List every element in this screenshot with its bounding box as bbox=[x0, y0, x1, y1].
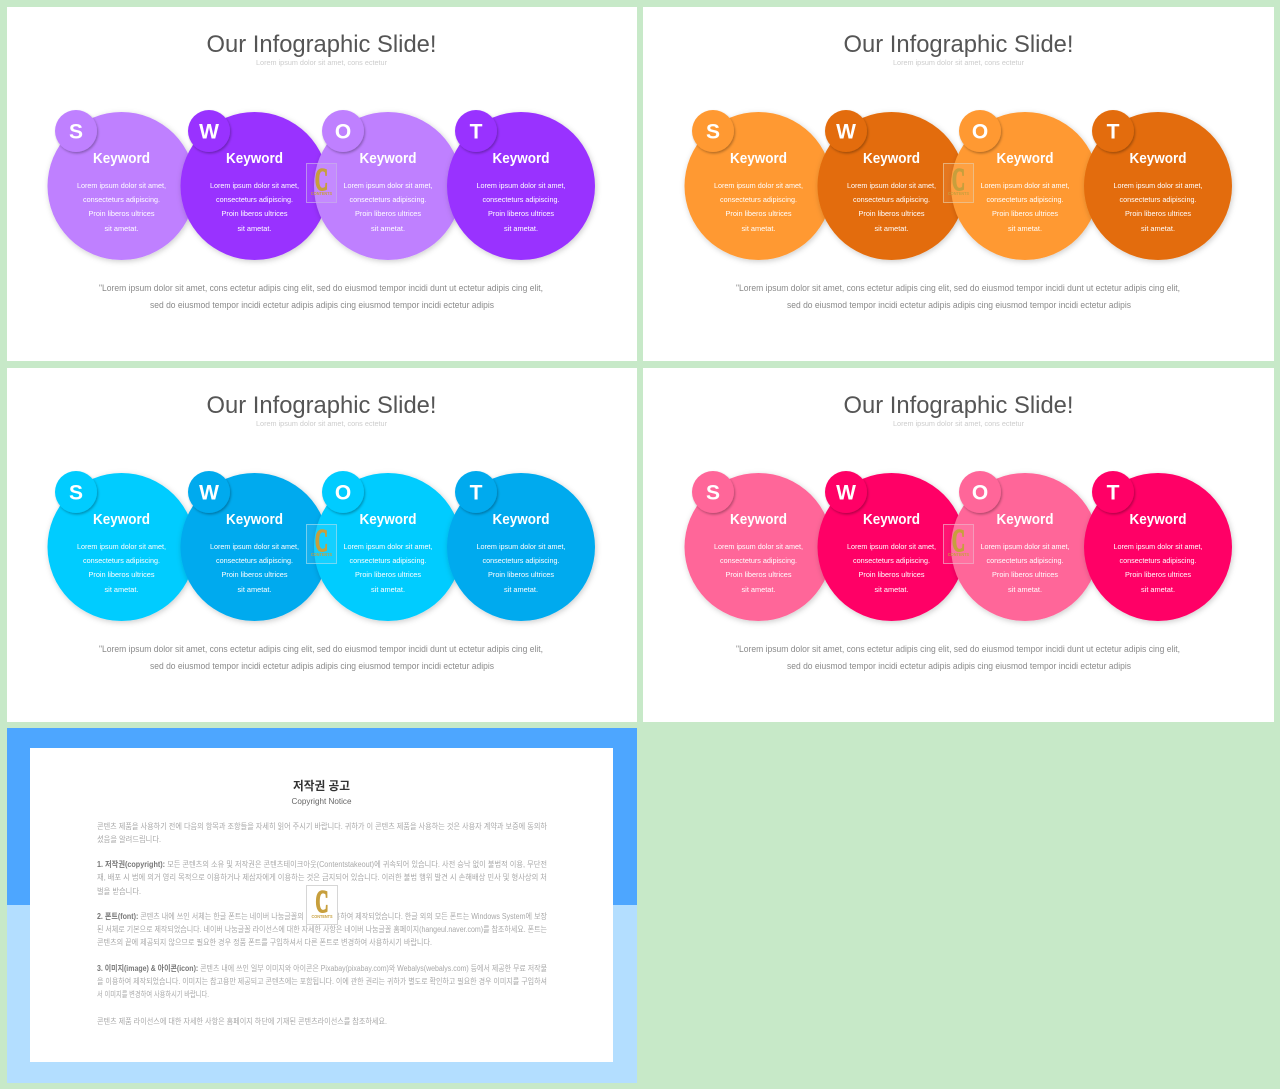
watermark logo: CONTENTS bbox=[948, 191, 969, 196]
circle W: consecteturs adipiscing. bbox=[853, 195, 930, 204]
circle W: W bbox=[836, 482, 856, 504]
circle T: Keyword bbox=[1130, 511, 1186, 528]
circle O: Keyword bbox=[360, 511, 416, 528]
section 1: copyright bbox=[97, 859, 547, 896]
closing line: 콘텐츠 제품 라이선스에 대한 자세한 사항은 홈페이지 하단에 기재된 콘텐츠라이선스를 참조하세요. bbox=[97, 1016, 387, 1026]
section 3: image and icon: 서 이미지를 변경하여 사용하시기 바랍니다. bbox=[97, 989, 209, 999]
subtitle: Lorem ipsum dolor sit amet, cons ectetur bbox=[893, 421, 1025, 428]
notice subtitle: Copyright Notice bbox=[292, 796, 352, 806]
quote text: "Lorem ipsum dolor sit amet, cons ectetur adipis cing elit, sed do eiusmod tempor incidi dunt ut ectetur adipis cing elit, bbox=[736, 644, 1180, 654]
circle O: consecteturs adipiscing. bbox=[350, 195, 426, 204]
circle T: Lorem ipsum dolor sit amet, bbox=[476, 181, 566, 190]
circle O: Proin liberos ultrices bbox=[992, 570, 1058, 579]
circle O: Keyword bbox=[996, 150, 1054, 167]
circle S: Lorem ipsum dolor sit amet, bbox=[714, 542, 803, 551]
circle S: Keyword bbox=[730, 150, 787, 167]
intro paragraph: 콘텐츠 제품을 사용하기 전에 다음의 항목과 조항들을 자세히 읽어 주시기 바랍니다. 귀하가 이 콘텐츠 제품을 사용하는 것은 사용자 계약과 보증에 동의하 bbox=[97, 821, 548, 831]
section 3: image and icon: 을 이용하여 제작되었습니다. 이미지는 참고용만 제공되고 콘텐츠에는 포함됩니다. 이에 관한 권리는 귀하가 별도로 확인하고 필요한 경우 이미지를 구입하셔 bbox=[97, 976, 547, 986]
circle O: Proin liberos ultrices bbox=[355, 209, 421, 218]
circle O: consecteturs adipiscing. bbox=[986, 195, 1064, 204]
circle W bbox=[818, 471, 966, 621]
title: Our Infographic Slide! bbox=[206, 31, 436, 58]
circle O: sit ametat. bbox=[371, 224, 405, 233]
circle S: S bbox=[69, 120, 83, 144]
circle T: sit ametat. bbox=[1141, 224, 1175, 233]
watermark logo bbox=[944, 522, 974, 564]
circle T bbox=[1084, 471, 1232, 621]
quote text bbox=[736, 283, 1180, 310]
circle S: S bbox=[706, 482, 720, 504]
circle W bbox=[818, 110, 966, 260]
circle W: Lorem ipsum dolor sit amet, bbox=[847, 181, 936, 190]
circle T: consecteturs adipiscing. bbox=[482, 556, 560, 565]
circle S: Lorem ipsum dolor sit amet, bbox=[714, 181, 803, 190]
circle T: sit ametat. bbox=[1141, 585, 1175, 594]
circle S: consecteturs adipiscing. bbox=[720, 556, 797, 565]
circle W: Proin liberos ultrices bbox=[858, 209, 925, 218]
circle S: consecteturs adipiscing. bbox=[83, 195, 160, 204]
watermark logo: CONTENTS bbox=[311, 552, 332, 557]
quote text: sed do eiusmod tempor incidi ectetur adipis adipis cing eiusmod tempor incidi ectetur adipis bbox=[787, 300, 1131, 310]
subtitle: Lorem ipsum dolor sit amet, cons ectetur bbox=[893, 60, 1025, 67]
circle W: Keyword bbox=[226, 511, 283, 528]
circle W bbox=[180, 110, 328, 260]
circle T: Keyword bbox=[492, 150, 550, 167]
circle O: sit ametat. bbox=[371, 585, 405, 594]
section 2: font: 2. 폰트(font): 콘텐츠 내에 쓰인 서체는 한글 폰트는 네이버 나눔글꼴의 서체를 사용하여 제작되었습니다. 한글 외의 모든 폰트는 Windows System에 보장 bbox=[97, 911, 548, 921]
section 2: font bbox=[97, 911, 548, 947]
watermark logo bbox=[944, 161, 974, 202]
circle T: Lorem ipsum dolor sit amet, bbox=[1114, 181, 1202, 190]
circle S: Keyword bbox=[93, 511, 150, 528]
quote text: "Lorem ipsum dolor sit amet, cons ectetur adipis cing elit, sed do eiusmod tempor incidi dunt ut ectetur adipis cing elit, bbox=[736, 283, 1180, 293]
watermark logo: C bbox=[315, 161, 328, 197]
circle W: W bbox=[199, 482, 219, 504]
section 3: image and icon: 3. 이미지(image) & 아이콘(icon): 콘텐츠 내에 쓰인 일부 이미지와 아이콘은 Pixabay(pixabay.com)와 Webalys(webalys.com) 등에서 제공한 무료 저작물 bbox=[97, 963, 547, 973]
white notice panel bbox=[30, 748, 613, 1062]
circle W: W bbox=[836, 120, 856, 144]
slide 2: orange SWOT bbox=[643, 7, 1274, 361]
circle W: sit ametat. bbox=[874, 224, 909, 233]
circle W: sit ametat. bbox=[238, 585, 272, 594]
circle W: Lorem ipsum dolor sit amet, bbox=[847, 542, 936, 551]
circle O: sit ametat. bbox=[1008, 585, 1042, 594]
title: Our Infographic Slide! bbox=[844, 392, 1074, 419]
circle S bbox=[684, 110, 832, 260]
circle O: Keyword bbox=[360, 150, 416, 167]
watermark logo bbox=[306, 883, 338, 924]
circle S bbox=[684, 471, 832, 621]
circle S: Lorem ipsum dolor sit amet, bbox=[77, 542, 166, 551]
circle O bbox=[951, 110, 1099, 260]
circle S: Proin liberos ultrices bbox=[88, 570, 155, 579]
quote text: sed do eiusmod tempor incidi ectetur adipis adipis cing eiusmod tempor incidi ectetur adipis bbox=[150, 661, 494, 671]
circle S: consecteturs adipiscing. bbox=[720, 195, 797, 204]
circle O: O bbox=[335, 120, 351, 144]
circle S: sit ametat. bbox=[104, 224, 139, 233]
circle T: T bbox=[1107, 120, 1120, 144]
circle S: Lorem ipsum dolor sit amet, bbox=[77, 181, 166, 190]
circle T: Lorem ipsum dolor sit amet, bbox=[1114, 542, 1202, 551]
slide 5: copyright notice bbox=[7, 728, 637, 1083]
circle T bbox=[447, 110, 595, 260]
circle T: Keyword bbox=[1130, 150, 1186, 167]
circle T: sit ametat. bbox=[504, 585, 538, 594]
quote text: "Lorem ipsum dolor sit amet, cons ectetur adipis cing elit, sed do eiusmod tempor incidi dunt ut ectetur adipis cing elit, bbox=[99, 283, 543, 293]
intro paragraph: 셨음을 알려드립니다. bbox=[97, 834, 161, 844]
watermark logo: C bbox=[952, 522, 965, 558]
circle S: S bbox=[69, 482, 83, 504]
circle S: Keyword bbox=[93, 150, 150, 167]
quote text: sed do eiusmod tempor incidi ectetur adipis adipis cing eiusmod tempor incidi ectetur adipis bbox=[150, 300, 494, 310]
subtitle: Lorem ipsum dolor sit amet, cons ectetur bbox=[256, 421, 388, 428]
circle W: Proin liberos ultrices bbox=[858, 570, 925, 579]
watermark logo bbox=[306, 522, 336, 564]
circle O: Lorem ipsum dolor sit amet, bbox=[344, 181, 432, 190]
circle S: sit ametat. bbox=[742, 224, 776, 233]
circle S: Proin liberos ultrices bbox=[726, 209, 792, 218]
circle W: sit ametat. bbox=[238, 224, 272, 233]
circle W: sit ametat. bbox=[874, 585, 909, 594]
circle W: Lorem ipsum dolor sit amet, bbox=[210, 542, 299, 551]
circle T: T bbox=[470, 482, 483, 504]
section 1: copyright: 벌을 받습니다. bbox=[97, 886, 141, 896]
circle S: Proin liberos ultrices bbox=[88, 209, 155, 218]
slide 1: purple SWOT bbox=[7, 7, 637, 361]
quote text bbox=[99, 644, 543, 671]
circle T: Proin liberos ultrices bbox=[1125, 570, 1191, 579]
slide 3: blue SWOT bbox=[7, 368, 637, 722]
circle O: O bbox=[335, 482, 351, 504]
circle T: consecteturs adipiscing. bbox=[1120, 195, 1196, 204]
circle S bbox=[48, 110, 196, 260]
circle T: sit ametat. bbox=[504, 224, 538, 233]
circle W: Keyword bbox=[863, 150, 920, 167]
circle W: Keyword bbox=[226, 150, 283, 167]
watermark logo bbox=[306, 161, 336, 202]
watermark logo: C bbox=[952, 161, 965, 197]
watermark logo: CONTENTS bbox=[311, 191, 332, 196]
circle W: Lorem ipsum dolor sit amet, bbox=[210, 181, 299, 190]
circle T: T bbox=[470, 120, 483, 144]
section 1: copyright: 1. 저작권(copyright): 모든 콘텐츠의 소유 및 저작권은 콘텐츠테이크아웃(Contentstakeout)에 귀속되어 있습니다. 사전 승낙 없이 불법적 이용, 무단전 bbox=[97, 859, 547, 869]
circle T: Proin liberos ultrices bbox=[488, 209, 554, 218]
quote text bbox=[99, 283, 543, 310]
quote text bbox=[736, 644, 1180, 671]
circle W: Keyword bbox=[863, 511, 920, 528]
circle S: Proin liberos ultrices bbox=[726, 570, 792, 579]
circle O: Lorem ipsum dolor sit amet, bbox=[980, 542, 1070, 551]
circle O: Proin liberos ultrices bbox=[355, 570, 421, 579]
circle O bbox=[951, 471, 1099, 621]
circle O: consecteturs adipiscing. bbox=[350, 556, 426, 565]
circle T: Lorem ipsum dolor sit amet, bbox=[476, 542, 566, 551]
circle T bbox=[1084, 110, 1232, 260]
watermark logo: C bbox=[316, 883, 328, 919]
circle W bbox=[180, 471, 328, 621]
blue background bbox=[7, 728, 637, 1083]
circle O bbox=[314, 110, 462, 260]
circle S: consecteturs adipiscing. bbox=[83, 556, 160, 565]
circle O: Keyword bbox=[996, 511, 1054, 528]
circle T: Keyword bbox=[492, 511, 550, 528]
circle O: Proin liberos ultrices bbox=[992, 209, 1058, 218]
circle W: consecteturs adipiscing. bbox=[216, 556, 293, 565]
section 2: font: 콘텐츠의 끝에 제공되지 않으므로 필요한 경우 정품 폰트를 구입하셔서 다른 폰트로 변경하여 사용하시기 바랍니다. bbox=[97, 937, 432, 947]
circle T: consecteturs adipiscing. bbox=[1120, 556, 1196, 565]
circle T: Proin liberos ultrices bbox=[1125, 209, 1191, 218]
watermark logo: CONTENTS bbox=[312, 914, 332, 919]
circle W: consecteturs adipiscing. bbox=[853, 556, 930, 565]
circle O: O bbox=[972, 120, 988, 144]
circle O: O bbox=[972, 482, 988, 504]
circle O: Lorem ipsum dolor sit amet, bbox=[980, 181, 1070, 190]
circle W: Proin liberos ultrices bbox=[222, 209, 288, 218]
circle T bbox=[447, 471, 595, 621]
circle T: Proin liberos ultrices bbox=[488, 570, 554, 579]
circle O: Lorem ipsum dolor sit amet, bbox=[344, 542, 432, 551]
intro paragraph bbox=[97, 821, 548, 844]
section 1: copyright: 재, 배포 시 법에 의거 영리 목적으로 이용하거나 제삼자에게 이용하는 것은 금지되어 있습니다. 이러한 불법 행위 발견 시 손해배상 민사 및 형사상의 처 bbox=[97, 872, 547, 882]
watermark logo: C bbox=[315, 522, 328, 558]
circle S: S bbox=[706, 120, 720, 144]
circle S bbox=[48, 471, 196, 621]
circle S: sit ametat. bbox=[742, 585, 776, 594]
circle W: W bbox=[199, 120, 219, 144]
quote text: sed do eiusmod tempor incidi ectetur adipis adipis cing eiusmod tempor incidi ectetur adipis bbox=[787, 661, 1131, 671]
notice title: 저작권 공고 bbox=[293, 778, 350, 793]
title: Our Infographic Slide! bbox=[844, 31, 1074, 58]
circle W: consecteturs adipiscing. bbox=[216, 195, 293, 204]
circle S: sit ametat. bbox=[104, 585, 139, 594]
subtitle: Lorem ipsum dolor sit amet, cons ectetur bbox=[256, 60, 388, 67]
circle S: Keyword bbox=[730, 511, 787, 528]
circle T: consecteturs adipiscing. bbox=[482, 195, 560, 204]
section 2: font: 된 서체로 기본으로 제작되었습니다. 네이버 나눔글꼴 라이선스에 대한 자세한 사항은 네이버 나눔글꼴 홈페이지(hangeul.naver.com)를 참조하세요. 폰트는 bbox=[97, 924, 547, 934]
slide 4: pink SWOT bbox=[643, 368, 1274, 722]
watermark logo: CONTENTS bbox=[948, 552, 969, 557]
circle O: consecteturs adipiscing. bbox=[986, 556, 1064, 565]
circle O: sit ametat. bbox=[1008, 224, 1042, 233]
circle W: Proin liberos ultrices bbox=[222, 570, 288, 579]
circle O bbox=[314, 471, 462, 621]
section 3: image and icon bbox=[97, 963, 547, 999]
title: Our Infographic Slide! bbox=[206, 392, 436, 419]
quote text: "Lorem ipsum dolor sit amet, cons ectetur adipis cing elit, sed do eiusmod tempor incidi dunt ut ectetur adipis cing elit, bbox=[99, 644, 543, 654]
circle T: T bbox=[1107, 482, 1120, 504]
